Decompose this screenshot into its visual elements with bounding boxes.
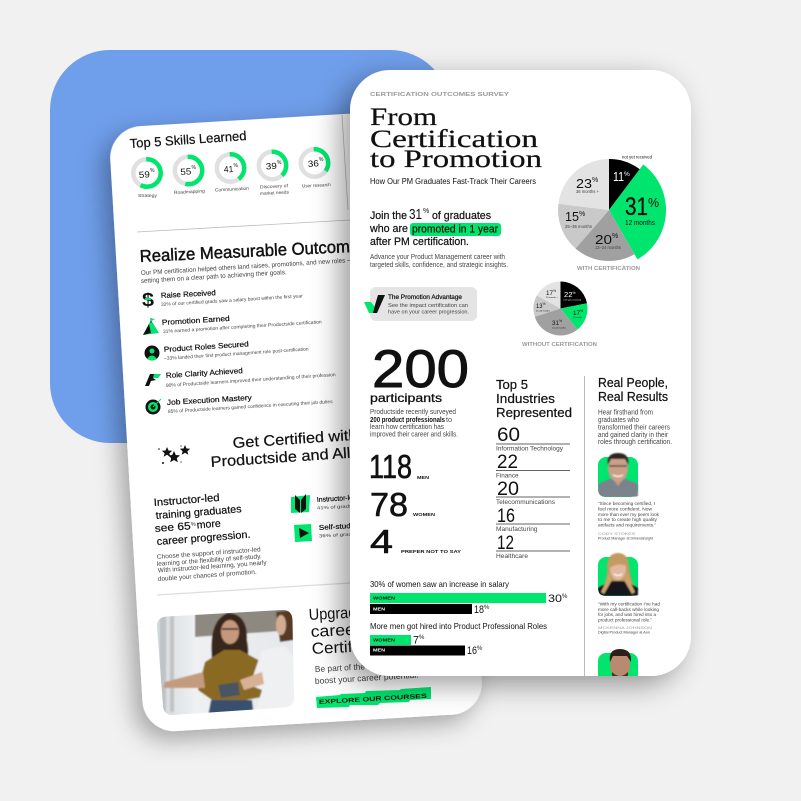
text block: choose support: double your chances of promotion.	[158, 569, 257, 583]
icon: play	[294, 524, 312, 542]
callout: promotion advantage: See the impact certification can	[388, 303, 468, 309]
chart: pie with certification: 12 months	[625, 220, 655, 227]
button: explore our courses: EXPLORE OUR COURSES	[319, 693, 427, 706]
chart: skill rings	[133, 149, 332, 198]
title: From	[370, 104, 438, 131]
heading: top 5 industries	[496, 377, 572, 420]
chart: hiring bars: %	[477, 646, 483, 652]
text block: hear firsthand: transformed their careers	[598, 424, 670, 432]
heading: get certified: Get Certified with	[232, 427, 358, 452]
chart: skill rings: %	[277, 160, 282, 166]
chart: pie without certification: %	[572, 291, 576, 295]
quote: cody stokes: artifacts and requirements.”	[598, 522, 656, 528]
chart: hiring bars: %	[419, 635, 425, 641]
chart: pie with certification: %	[612, 233, 618, 240]
icon: role clarity	[145, 374, 161, 386]
text block: hear firsthand	[598, 410, 672, 446]
text: self-study stat	[319, 523, 356, 538]
chart: pie without certification: %	[553, 289, 556, 293]
text block: hear firsthand: and gained clarity in their	[598, 432, 669, 439]
chart: salary increase bars: 30	[548, 593, 562, 605]
chart: pie with certification: %	[648, 196, 659, 210]
text block: instructor-led: see 65	[154, 520, 191, 535]
quote: cody stokes	[598, 501, 660, 540]
chart: pie with certification: WITH CERTIFICATION	[577, 266, 640, 272]
text block: instructor-led: career progression.	[156, 529, 251, 548]
list: industries: Healthcare	[496, 553, 529, 560]
text block: choose support: With instructor-led learning, you nearly	[158, 559, 268, 574]
chart: pie with certification: not yet received	[622, 154, 652, 160]
chart: skill rings: %	[150, 168, 155, 174]
chart: pie with certification: 31	[625, 193, 648, 221]
heading: get certified: Productside and All	[210, 445, 351, 471]
photo: two women talking	[157, 610, 294, 715]
chart: pie with certification: 25–36 months	[565, 224, 592, 229]
heading: top 5 industries: Top 5	[496, 377, 528, 392]
heading: top 5 industries: Industries	[496, 391, 556, 406]
photo: cody stokes	[598, 453, 638, 497]
quote: mckenna johnson: more call-backs while looking	[598, 607, 659, 612]
text block: hear firsthand: graduates who	[598, 417, 639, 424]
chart: skill rings: %	[192, 165, 196, 171]
chart: skill rings: User research	[302, 182, 332, 188]
text block: choose support: learning or the flexibility of self-study.	[157, 553, 262, 568]
chart: hiring bars: More men got hired into Product Professional Roles	[370, 621, 547, 631]
chart: skill rings: 39	[266, 161, 277, 171]
chart: salary increase bars	[370, 579, 568, 616]
stats: gender counts: MEN	[417, 475, 429, 480]
heading: top 5 industries: Represented	[496, 405, 572, 420]
text block: survey description: improved their career and skills.	[370, 430, 458, 438]
chart: pie without certification: %	[542, 302, 546, 306]
quote: mckenna johnson	[598, 602, 660, 634]
chart: skill rings: Communication	[215, 186, 250, 192]
text: instructor-led stat	[317, 495, 358, 510]
list: measurable outcomes: Raise Received	[161, 288, 216, 300]
chart: pie without certification: 22	[564, 292, 573, 299]
icon: stars	[158, 445, 190, 464]
chart: salary increase bars: MEN	[373, 606, 385, 612]
text block: choose support	[157, 546, 268, 583]
stats: gender counts: WOMEN	[413, 512, 435, 517]
chart: skill rings: 41	[224, 164, 234, 174]
chart: pie with certification: 23	[576, 176, 592, 191]
text block: upgrade your career	[308, 602, 402, 658]
text block: choose support: Choose the support of instructor-led	[157, 546, 261, 561]
text block: outcomes intro	[141, 257, 351, 285]
callout: promotion advantage: have on your career progression.	[388, 310, 469, 316]
chart: pie with certification: 20	[595, 232, 612, 247]
text block: be part of: Be part of the movement and	[315, 658, 423, 674]
heading: get certified	[210, 427, 358, 471]
chart: skill rings: market needs	[260, 189, 290, 196]
chart: hiring bars	[370, 621, 547, 657]
list: industries: Information Technology	[496, 446, 564, 452]
callout: join the 31%: 31	[409, 207, 422, 223]
icon: check mark	[364, 295, 385, 313]
icon: dollar: $	[142, 290, 154, 310]
callout: join the 31%	[369, 207, 501, 248]
list: measurable outcomes: ~33% landed their first product management role post-certification	[164, 346, 309, 362]
chart: pie without certification: 17	[573, 310, 580, 317]
callout: join the 31%: of graduates	[432, 210, 491, 222]
list: industries: 20	[497, 479, 519, 500]
list: industries: 12	[497, 533, 514, 554]
chart: pie with certification: %	[579, 211, 585, 218]
chart: salary increase bars: %	[484, 605, 490, 611]
chart: salary increase bars: WOMEN	[373, 596, 395, 600]
stats: gender counts: PREFER NOT TO SAY	[401, 549, 461, 554]
text block: instructor-led: %	[191, 522, 196, 528]
heading: realize measurable outcomes: Realize Measurable Outcomes	[139, 236, 368, 266]
quote: mckenna johnson: Digital Product Manager at Aon	[598, 630, 650, 634]
chart: hiring bars: 7	[413, 634, 419, 646]
chart: pie without certification: not yet received	[564, 298, 582, 302]
icon: book	[291, 494, 310, 513]
icon: person in circle	[144, 346, 160, 360]
text block: instructor-led	[153, 492, 251, 548]
stats: gender counts: 4	[370, 523, 393, 560]
chart: pie with certification: 15	[565, 209, 579, 224]
text block: advance your career	[370, 252, 508, 269]
chart: pie without certification: 36 months +	[546, 296, 559, 299]
panel: front card	[350, 70, 691, 693]
quote: cody stokes: Product Manager at Dimensinsight	[598, 536, 654, 540]
text: self-study stat: Self-study	[319, 523, 356, 532]
callout: join the 31%: after PM certification.	[370, 236, 469, 248]
stats: gender counts	[369, 448, 461, 560]
list: industries: Telecommunications	[496, 499, 555, 506]
callout: join the 31%: who are	[369, 223, 408, 235]
subtitle: How Our PM Graduates Fast-Track Their Careers	[370, 177, 536, 186]
title: Certification	[370, 126, 539, 153]
list: measurable outcomes: Product Roles Secured	[164, 339, 249, 354]
text block: hear firsthand: Hear firsthand from	[598, 410, 653, 416]
text: instructor-led stat: 41% of grads p	[317, 503, 358, 510]
heading: real people real results	[598, 376, 668, 404]
list: measurable outcomes: Job Execution Mastery	[167, 393, 252, 407]
list: measurable outcomes: 85% of Productside learners gained confidence in executing their job duties	[168, 399, 333, 415]
text block: upgrade your career: Upgrade your	[308, 602, 398, 624]
chart: pie with certification: %	[624, 171, 630, 178]
list: measurable outcomes: Role Clarity Achieved	[166, 366, 243, 380]
callout: promotion advantage: The Promotion Advantage	[388, 294, 462, 301]
text block: outcomes intro: setting them on a clear path to achieving their goals.	[141, 269, 287, 285]
text block: survey description: Productside recently surveyed	[370, 407, 456, 416]
text block: instructor-led: Instructor-led	[153, 492, 220, 509]
photo: third graduate	[598, 649, 638, 676]
chart: skill rings: Strategy	[138, 193, 158, 198]
chart: salary increase bars: 18	[474, 604, 484, 616]
callout: join the 31%: %	[423, 208, 429, 215]
callout: join the 31%: promoted in 1 year	[412, 224, 498, 236]
stats: gender counts: 78	[370, 486, 408, 523]
chart: pie with certification: 36 months +	[576, 189, 600, 194]
list: industries	[496, 425, 570, 560]
text block: be part of	[315, 658, 423, 686]
chart: skill rings: Roadmapping	[174, 188, 206, 195]
text block: instructor-led: more	[196, 518, 221, 531]
chart: hiring bars: MEN	[373, 648, 385, 652]
chart: pie without certification: 31	[552, 320, 559, 327]
chart: skill rings: 59	[139, 169, 150, 180]
title	[370, 104, 543, 173]
text block: hear firsthand: roles through certification.	[598, 439, 672, 446]
heading: real people real results: Real Results	[598, 390, 668, 404]
text block: survey description: learn how certification has	[370, 422, 444, 431]
quote: cody stokes: feel more confident. Now	[598, 506, 653, 512]
text block: upgrade your career: career	[310, 621, 362, 641]
quote: cody stokes: to me to create high quality	[598, 517, 658, 522]
text block: outcomes intro: Our PM certification helped others land raises, promotions, and new roles –	[141, 257, 351, 277]
chart: pie without certification: %	[559, 319, 562, 323]
chart: pie with certification: %	[592, 177, 598, 184]
text block: advance your career: Advance your Product Management career with	[370, 252, 505, 261]
stat: 200 participants: participants	[370, 391, 442, 405]
callout: join the 31%: Join the	[370, 210, 407, 222]
text block: survey description: 200 product professionals	[370, 415, 445, 424]
chart: pie without certification: %	[580, 309, 583, 313]
list: measurable outcomes	[142, 288, 336, 415]
quote: cody stokes: “Since becoming certified, I	[598, 501, 655, 506]
text block: upgrade your career: Certification	[311, 636, 402, 658]
stats: gender counts: 118	[369, 448, 412, 485]
quote: mckenna johnson: product professional role.”	[598, 618, 652, 622]
chart: pie with certification: 11	[613, 169, 624, 184]
eyebrow: CERTIFICATION OUTCOMES SURVEY	[370, 92, 509, 98]
chart: pie without certification	[522, 281, 597, 348]
heading: top 5 skills learned: Top 5 Skills Learned	[129, 128, 247, 151]
title: to Promotion	[370, 146, 543, 173]
blue background panel	[50, 50, 450, 443]
text block: survey description	[370, 407, 458, 438]
chart: skill rings: %	[319, 157, 324, 163]
text block: be part of: boost your career potential.	[315, 670, 419, 686]
list: industries: Finance	[496, 472, 519, 480]
stat: 200 participants: 200	[372, 340, 469, 399]
list: industries: 60	[497, 425, 520, 446]
button: explore our courses	[316, 687, 431, 708]
chart: hiring bars: WOMEN	[373, 638, 395, 642]
chart: pie without certification: WITHOUT CERTIFICATION	[522, 342, 597, 348]
heading: real people real results: Real People,	[598, 376, 668, 390]
list: industries: Manufacturing	[496, 526, 538, 533]
chart: salary increase bars: 30% of women saw an increase in salary	[370, 579, 510, 589]
list: measurable outcomes: 90% of Productside learners improved their understanding of their profession	[166, 372, 336, 389]
chart: pie without certification: 13	[536, 303, 543, 310]
quote: cody stokes: more than ever my peers look	[598, 512, 660, 517]
chart: salary increase bars: %	[562, 594, 568, 600]
icon: flag on mountain	[143, 318, 159, 335]
chart: skill rings: %	[234, 163, 238, 169]
chart: pie without certification: 17	[546, 290, 553, 297]
chart: skill rings: Discovery of	[260, 183, 289, 189]
callout: promotion advantage	[364, 287, 477, 321]
chart: pie without certification: 25–36 months	[536, 310, 551, 312]
chart: skill rings: 55	[180, 166, 192, 177]
quote: cody stokes: CODY STOKES	[598, 531, 635, 536]
text: self-study stat: 36% of grads	[319, 531, 356, 538]
quote: mckenna johnson: MCKENNA JOHNSON	[598, 625, 652, 630]
text: instructor-led stat: Instructor-led	[317, 495, 357, 504]
photo: mckenna johnson	[598, 553, 638, 596]
text block: advance your career: targeted skills, confidence, and strategic insights.	[370, 260, 508, 269]
chart: skill rings: 36	[308, 158, 319, 169]
list: industries: 16	[497, 506, 515, 527]
list: measurable outcomes: 31% earned a promotion after completing their Productside certification	[163, 319, 322, 335]
list: measurable outcomes: Promotion Earned	[162, 314, 230, 327]
quote: mckenna johnson: “With my certification I've had	[598, 602, 660, 606]
chart: pie with certification	[558, 154, 666, 272]
list: measurable outcomes: 32% of our certified grads saw a salary boost within the first year	[161, 293, 303, 308]
text block: survey description: to	[446, 415, 452, 424]
chart: pie without certification: 12 months	[573, 316, 583, 319]
icon: target	[146, 399, 161, 414]
panel: back card	[108, 108, 484, 733]
chart: pie without certification: 13–24 months	[552, 326, 567, 330]
chart: hiring bars: 16	[467, 645, 477, 657]
quote: mckenna johnson: for jobs, and was hired into a	[598, 612, 656, 617]
text block: instructor-led: training graduates	[155, 503, 242, 522]
chart: pie with certification: 13–24 months	[595, 245, 621, 250]
list: industries: 22	[497, 452, 518, 473]
